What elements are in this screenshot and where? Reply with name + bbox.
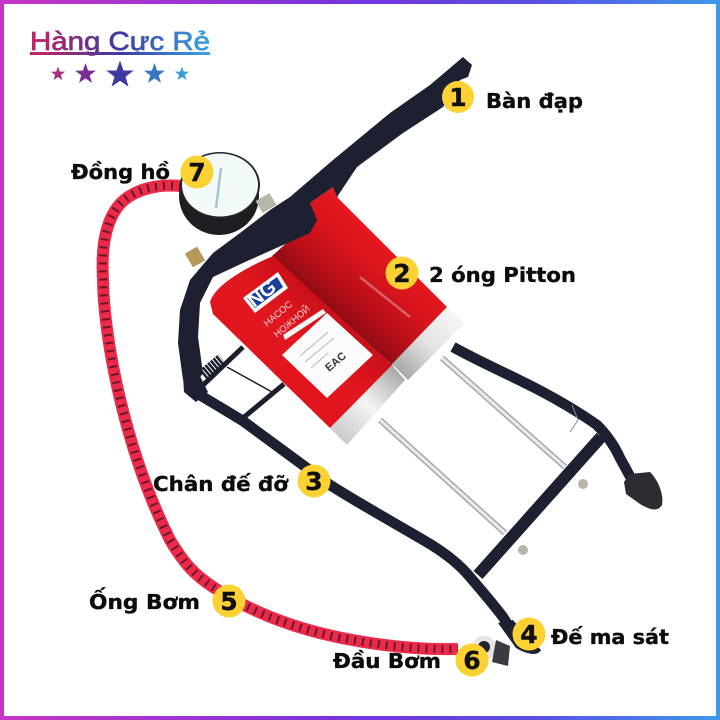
callout 2: cylinders: 2 óng Pitton bbox=[429, 263, 576, 287]
callout 7: gauge: 7 bbox=[188, 158, 206, 187]
callout 5: hose: Ống Bơm bbox=[89, 588, 200, 614]
rear piston cylinder bbox=[272, 187, 465, 380]
callout 3: base stand: 3 bbox=[305, 467, 323, 496]
callout 7: gauge: Đồng hồ bbox=[71, 160, 170, 184]
callout 5: hose: 5 bbox=[220, 587, 238, 616]
foot pump lever arm bbox=[178, 57, 472, 385]
callout 3: base stand bbox=[153, 464, 330, 498]
base frame cross bracing and spring bbox=[200, 347, 284, 418]
pressure gauge bbox=[179, 152, 260, 235]
cross bar bolts bbox=[518, 479, 588, 555]
cylinder cyrillic text: НАСОС bbox=[262, 299, 295, 329]
callout 1: pedal bbox=[442, 81, 583, 113]
callout 3: base stand: Chân đế đỡ bbox=[153, 472, 289, 496]
callout 1: pedal: Bàn đạp bbox=[486, 89, 583, 113]
callout 6: pump head: Đầu Bơm bbox=[333, 649, 441, 673]
brand logo badge: NG bbox=[244, 276, 281, 312]
right base rail bbox=[453, 347, 632, 480]
gauge fittings bbox=[185, 193, 276, 267]
logo stars bbox=[51, 60, 189, 87]
left base rail bbox=[183, 372, 541, 654]
rubber foot tip bbox=[624, 472, 662, 509]
callout 1: pedal: 1 bbox=[449, 83, 467, 112]
callout 7: gauge bbox=[71, 156, 214, 188]
label top bar bbox=[283, 309, 326, 340]
friction foot bbox=[498, 620, 541, 654]
callout 2: cylinders bbox=[386, 256, 576, 290]
front cross bar bbox=[478, 437, 601, 575]
callout 5: hose bbox=[89, 584, 246, 618]
wire tie bbox=[570, 405, 578, 432]
callout 6: pump head: 6 bbox=[463, 646, 481, 675]
callout 4: friction foot: 4 bbox=[520, 620, 538, 649]
brand logo bbox=[30, 26, 210, 87]
white product label bbox=[282, 313, 373, 398]
pump head connector bbox=[472, 636, 510, 666]
EAC mark: EAC bbox=[323, 350, 349, 374]
front piston cylinder: НОЖНОЙ bbox=[271, 303, 313, 340]
base rail bracket bbox=[183, 372, 208, 402]
piston rods bbox=[380, 358, 565, 533]
rubber air hose bbox=[103, 186, 458, 649]
foot pump illustration bbox=[103, 57, 662, 654]
callout 2: cylinders: 2 bbox=[393, 259, 411, 288]
callout 4: friction foot bbox=[512, 618, 669, 650]
front piston cylinder bbox=[210, 256, 405, 445]
callout 4: friction foot: Đế ma sát bbox=[551, 625, 669, 649]
logo wordmark: Hàng Cực Rẻ bbox=[30, 26, 210, 56]
label fine print bbox=[300, 332, 334, 368]
logo underline bbox=[30, 52, 210, 55]
callout 6: pump head bbox=[333, 644, 488, 676]
